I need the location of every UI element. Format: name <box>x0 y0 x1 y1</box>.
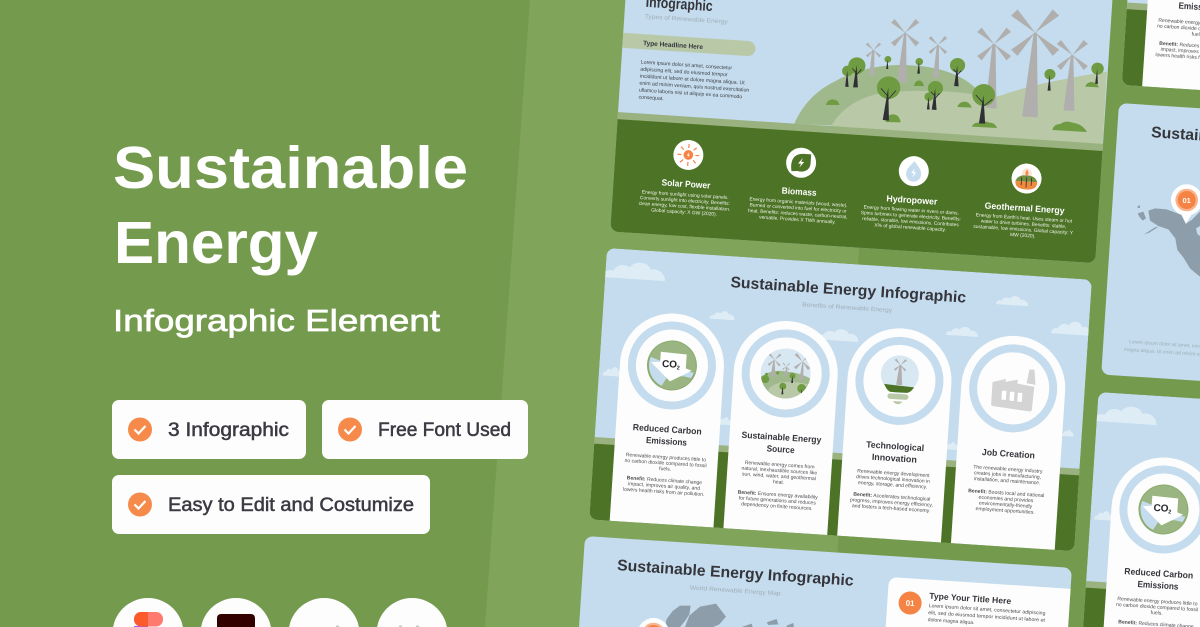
clouds <box>593 260 1094 458</box>
card text: job creation: installation, and maintenance. <box>974 476 1041 486</box>
card title <box>1123 566 1194 593</box>
description: solar power: clean energy, low cost, flexible installation. <box>638 201 730 213</box>
icon: CO2 globe: CO <box>1153 503 1169 515</box>
card text: sustainable energy source: natural, inexhaustible sources like <box>741 466 817 477</box>
feature badge: Free Font Used: Free Font Used <box>378 420 511 441</box>
card text: sustainable energy source: Renewable energy comes from <box>745 460 815 471</box>
feature badge: 3 Infographic <box>112 400 306 459</box>
card text: reduced carbon emissions: lowers health risks from air pollution. <box>623 487 705 498</box>
card text: reduced carbon emissions: no carbon dioxide compared to fossil <box>624 458 707 469</box>
slide subheading: Benefits of Renewable Energy <box>802 302 892 314</box>
slide content <box>1124 123 1200 369</box>
icon: landscape <box>743 331 828 416</box>
paragraph: incididunt ut labore et dolore magna aliqua. Ut <box>640 74 745 86</box>
description: geothermal energy: Energy from Earth's heat. Uses steam or hot <box>976 212 1073 225</box>
description: hydropower: reliable, storable, low emissions. Contributes <box>862 216 959 228</box>
map: greenland and north atlantic <box>665 604 794 627</box>
card text <box>1115 596 1199 627</box>
panel: types of renewable energy slide <box>605 0 1120 271</box>
card: job creation <box>951 333 1069 550</box>
icon: Figma <box>112 598 184 627</box>
ground band <box>1127 2 1148 10</box>
icon: biomass <box>785 147 817 179</box>
text card 01: 01 <box>905 599 915 608</box>
slide heading: Sustainable Energy Infographic <box>730 274 967 307</box>
card title: Reduced Carbon <box>1124 566 1194 581</box>
card text: sustainable energy source <box>737 460 820 512</box>
footnote <box>1124 339 1200 364</box>
card title: technological innovation <box>865 439 924 465</box>
card text: reduced carbon emissions <box>622 452 707 498</box>
card text <box>1155 18 1200 64</box>
description: solar power <box>638 189 731 219</box>
slide content <box>611 557 1071 627</box>
title: Sustainable <box>113 135 468 201</box>
ground band <box>1086 581 1107 589</box>
icon: CO2 globe <box>629 323 714 408</box>
icon: light bulb with turbine <box>857 338 942 423</box>
paragraph: consequat. <box>638 94 664 102</box>
description: solar power: Energy from sunlight using solar panels. <box>642 189 729 201</box>
text card 01: elit, sed do eiusmod tempor incididunt ut labore et <box>928 610 1046 624</box>
card text: technological innovation: Benefit: Accelerates technological <box>853 492 931 503</box>
icon: CO2 globe <box>1121 467 1200 552</box>
description: solar power: Converts sunlight into electricity. Benefits: <box>640 195 730 207</box>
panel: partial map slide, right <box>1101 103 1200 406</box>
card title: reduced carbon emissions <box>632 422 702 449</box>
card text: technological innovation: progress, improves energy efficiency, <box>850 497 933 509</box>
card title: job creation: Job Creation <box>982 447 1035 460</box>
card: reduced carbon emissions <box>610 310 727 528</box>
paragraph: Lorem ipsum dolor sit amet, consectetur <box>641 60 733 72</box>
slide subheading: Types of Renewable Energy <box>645 14 728 26</box>
feature badge: Free Font Used <box>322 400 528 459</box>
card title: reduced carbon emissions: Emissions <box>646 435 687 448</box>
heading: geothermal energy: Geothermal Energy <box>984 200 1065 216</box>
icon: CO2 globe: 2 <box>677 365 680 372</box>
card text: job creation: economies and provides <box>978 495 1034 504</box>
feature badge: 3 Infographic: 3 Infographic <box>168 420 289 441</box>
clouds <box>1094 406 1156 520</box>
card text: sustainable energy source: heat. <box>773 479 784 486</box>
description: hydropower: X% of global renewable capacity. <box>874 223 946 233</box>
card text: Renewable energy produces little to <box>1117 596 1198 607</box>
card text: technological innovation <box>849 468 935 514</box>
slide subheading: World Renewable Energy Map <box>690 585 782 597</box>
card title: sustainable energy source <box>740 430 822 457</box>
dark green ground <box>1083 588 1106 627</box>
slide background <box>567 536 1072 627</box>
card: technological innovation <box>837 325 955 542</box>
card text: reduced carbon emissions: fuels. <box>659 466 671 473</box>
description: biomass <box>747 196 848 226</box>
paragraph <box>638 60 751 108</box>
icon: CO2 globe: 2 <box>1168 509 1172 516</box>
card text: reduced carbon emissions: impact, improves air quality, and <box>628 481 700 492</box>
panel: world renewable energy map slide <box>567 536 1072 627</box>
card text: technological innovation: and fosters a tech-based economy. <box>852 503 930 514</box>
description: hydropower <box>860 204 961 234</box>
title: Energy <box>114 210 318 276</box>
icon: Adobe Illustrator <box>200 598 272 627</box>
card text: job creation: creates jobs in manufacturing, <box>974 470 1041 481</box>
icon: software logo <box>376 598 448 627</box>
icon: geothermal energy <box>1011 163 1043 194</box>
slide background <box>1081 392 1200 627</box>
dark green ground <box>1122 9 1200 90</box>
paragraph: ullamco laboris nisi ut aliquip ex ea commodo <box>639 88 743 100</box>
dark green ground <box>605 119 1112 271</box>
paragraph: adipiscing elit, sed do eiusmod tempor <box>640 67 728 78</box>
headline pill <box>622 33 756 57</box>
slide background <box>610 0 1113 263</box>
icon: hydropower <box>898 155 930 187</box>
card text: fuels. <box>1150 610 1163 617</box>
card text: sustainable energy source: dependency on finite resources. <box>741 501 813 512</box>
map: north america <box>1138 205 1200 277</box>
slide heading: Sustainable Energy Infographic <box>617 557 855 590</box>
description: geothermal energy: water to drive turbines. Benefits: stable, <box>981 218 1066 230</box>
headline pill: Type Headline Here <box>643 40 703 51</box>
card text: job creation: Benefit: Boosts local and national <box>968 488 1045 499</box>
card text: sustainable energy source: Benefit: Ensures energy availability <box>737 490 818 501</box>
feature badge: Easy to Edit and Costumize <box>112 475 430 534</box>
heading: biomass: Biomass <box>781 186 817 198</box>
panel: partial benefits slide, top right <box>1122 0 1200 90</box>
illustration: hills, wind turbines and trees <box>794 9 1107 145</box>
card title: technological innovation: Innovation <box>872 452 917 465</box>
paragraph: enim ad minim veniam, quis nostrud exercitation <box>639 81 750 94</box>
text card 01: Type Your Title Here <box>929 591 1012 606</box>
feature badge: Easy to Edit and Costumize: Easy to Edit and Costumize <box>168 495 414 516</box>
text card 01: dolore magna aliqua. <box>928 617 975 626</box>
card title: sustainable energy source: Sustainable Energy <box>741 430 822 445</box>
icon: solar power <box>672 139 704 171</box>
card: sustainable energy source <box>723 318 841 535</box>
slide background <box>1101 103 1200 406</box>
ground band <box>594 437 1080 476</box>
card text: sustainable energy source: sun, wind, water, and geothermal <box>742 471 816 482</box>
card text: technological innovation: drives technological innovation in <box>856 474 930 485</box>
card text: job creation <box>967 464 1046 516</box>
card title: sustainable energy source: Source <box>766 443 795 455</box>
text card 01 <box>882 577 1071 627</box>
description: biomass: versatile. Provides X TWh annually. <box>759 215 836 226</box>
description: hydropower: Spins turbines to generate electricity. Benefits: <box>861 210 961 223</box>
description: biomass: Energy from organic materials (wood, waste). <box>749 196 848 209</box>
description: hydropower: Energy from flowing water in rivers or dams. <box>863 204 959 217</box>
description: geothermal energy: sustainable, low emissions. Global capacity: Y <box>973 224 1074 236</box>
card title: Emissions <box>1137 579 1179 592</box>
slide background <box>589 248 1092 551</box>
description: geothermal energy: MW (2020). <box>1010 232 1036 240</box>
slide content <box>605 0 1120 271</box>
heading: hydropower: Hydropower <box>886 193 938 207</box>
ground band <box>613 112 1112 152</box>
card text: reduced carbon emissions: Renewable energy produces little to <box>626 452 706 463</box>
description: biomass: Burned or converted into fuel for electricity or <box>749 202 847 215</box>
card text: no carbon dioxide compared to fossil <box>1116 602 1198 613</box>
subtitle: Infographic Element <box>113 303 440 338</box>
description: biomass: heat. Benefits: reduces waste, carbon-neutral, <box>748 208 848 221</box>
title <box>113 135 468 276</box>
icon: software logo <box>288 598 360 627</box>
description: geothermal energy <box>973 212 1075 242</box>
description: solar power: Global capacity: X GW (2020). <box>651 207 717 218</box>
panel: benefits of renewable energy slide <box>587 248 1095 551</box>
icon: factory <box>971 346 1056 431</box>
card text: reduced carbon emissions: Benefit: Reduces climate change <box>627 475 702 486</box>
map pin 01: 01 <box>1183 196 1191 205</box>
card title: reduced carbon emissions: Reduced Carbon <box>633 422 702 437</box>
dark green ground <box>589 444 1079 551</box>
card title: technological innovation: Technological <box>866 439 924 453</box>
icon: CO2 globe: CO <box>662 359 677 371</box>
card text: sustainable energy source: for future generations and reduces <box>739 495 816 507</box>
slide background <box>1122 0 1198 90</box>
card <box>1142 0 1200 93</box>
card text: job creation: environmentally-friendly <box>979 500 1033 510</box>
map pin 01 <box>1171 184 1200 224</box>
heading: solar power: Solar Power <box>661 177 711 191</box>
card text: job creation: employment opportunities. <box>975 506 1035 516</box>
card text: technological innovation: energy, storage, and efficiency. <box>858 480 927 491</box>
card text: job creation: The renewable energy industry <box>973 464 1043 475</box>
card text: technological innovation: Renewable energy development <box>857 468 930 479</box>
card <box>1101 454 1200 627</box>
map pin 01 <box>638 618 670 627</box>
text card 01: Lorem ipsum dolor sit amet, consectetur adipiscing <box>928 603 1046 617</box>
panel: partial benefits slide, bottom right <box>1079 392 1200 627</box>
